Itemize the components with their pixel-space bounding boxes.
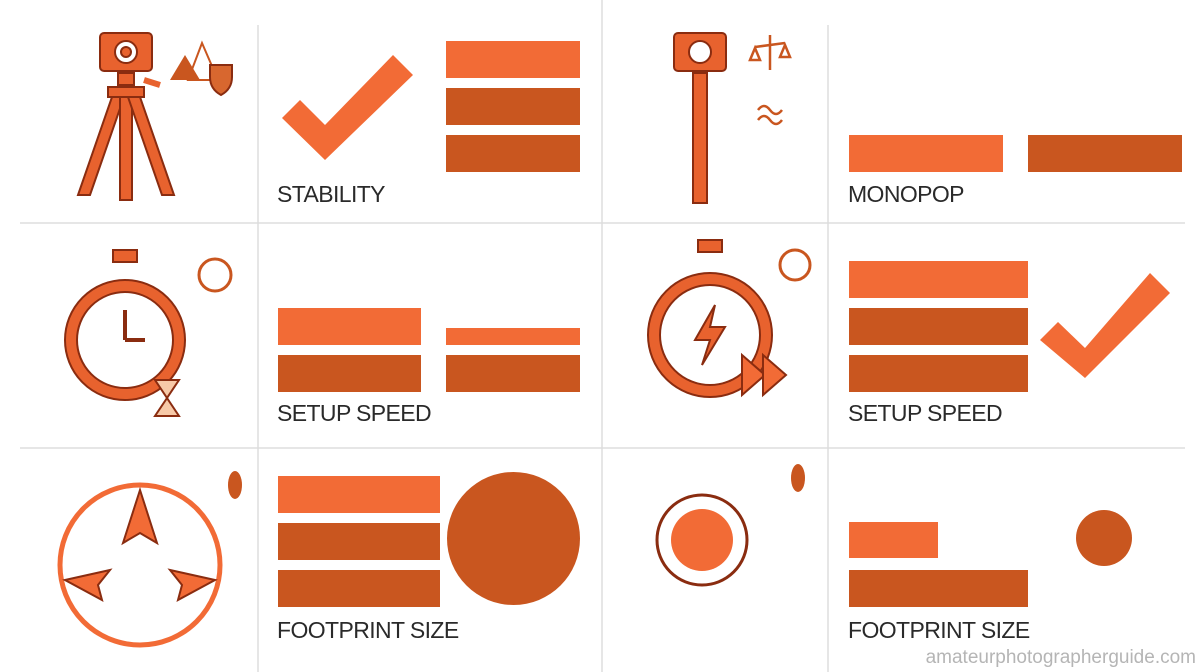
icon: fast stopwatch	[647, 239, 812, 398]
bars: footprint left	[278, 472, 580, 607]
watermark: amateurphotographerguide.com	[926, 647, 1196, 668]
icon: check setup speed	[1040, 273, 1170, 378]
label: footprint right: FOOTPRINT SIZE	[848, 617, 1030, 643]
label: setup speed left: SETUP SPEED	[277, 400, 431, 426]
bars: monopod	[849, 135, 1182, 172]
icon: monopod	[673, 32, 792, 204]
bars: stability	[446, 41, 580, 172]
label: monopod: MONOPOP	[848, 181, 964, 207]
label: stability: STABILITY	[277, 181, 385, 207]
icon: small circle footprint	[656, 464, 805, 586]
icon: compass circle	[58, 471, 242, 648]
label: footprint left: FOOTPRINT SIZE	[277, 617, 459, 643]
bars: setup speed right	[849, 261, 1028, 392]
bars: footprint right	[849, 510, 1132, 607]
icon: check stability	[282, 55, 413, 160]
icon: stopwatch hourglass	[64, 249, 232, 417]
icon: tripod with camera	[76, 32, 233, 201]
label: setup speed right: SETUP SPEED	[848, 400, 1002, 426]
bars: setup speed left	[278, 308, 580, 392]
